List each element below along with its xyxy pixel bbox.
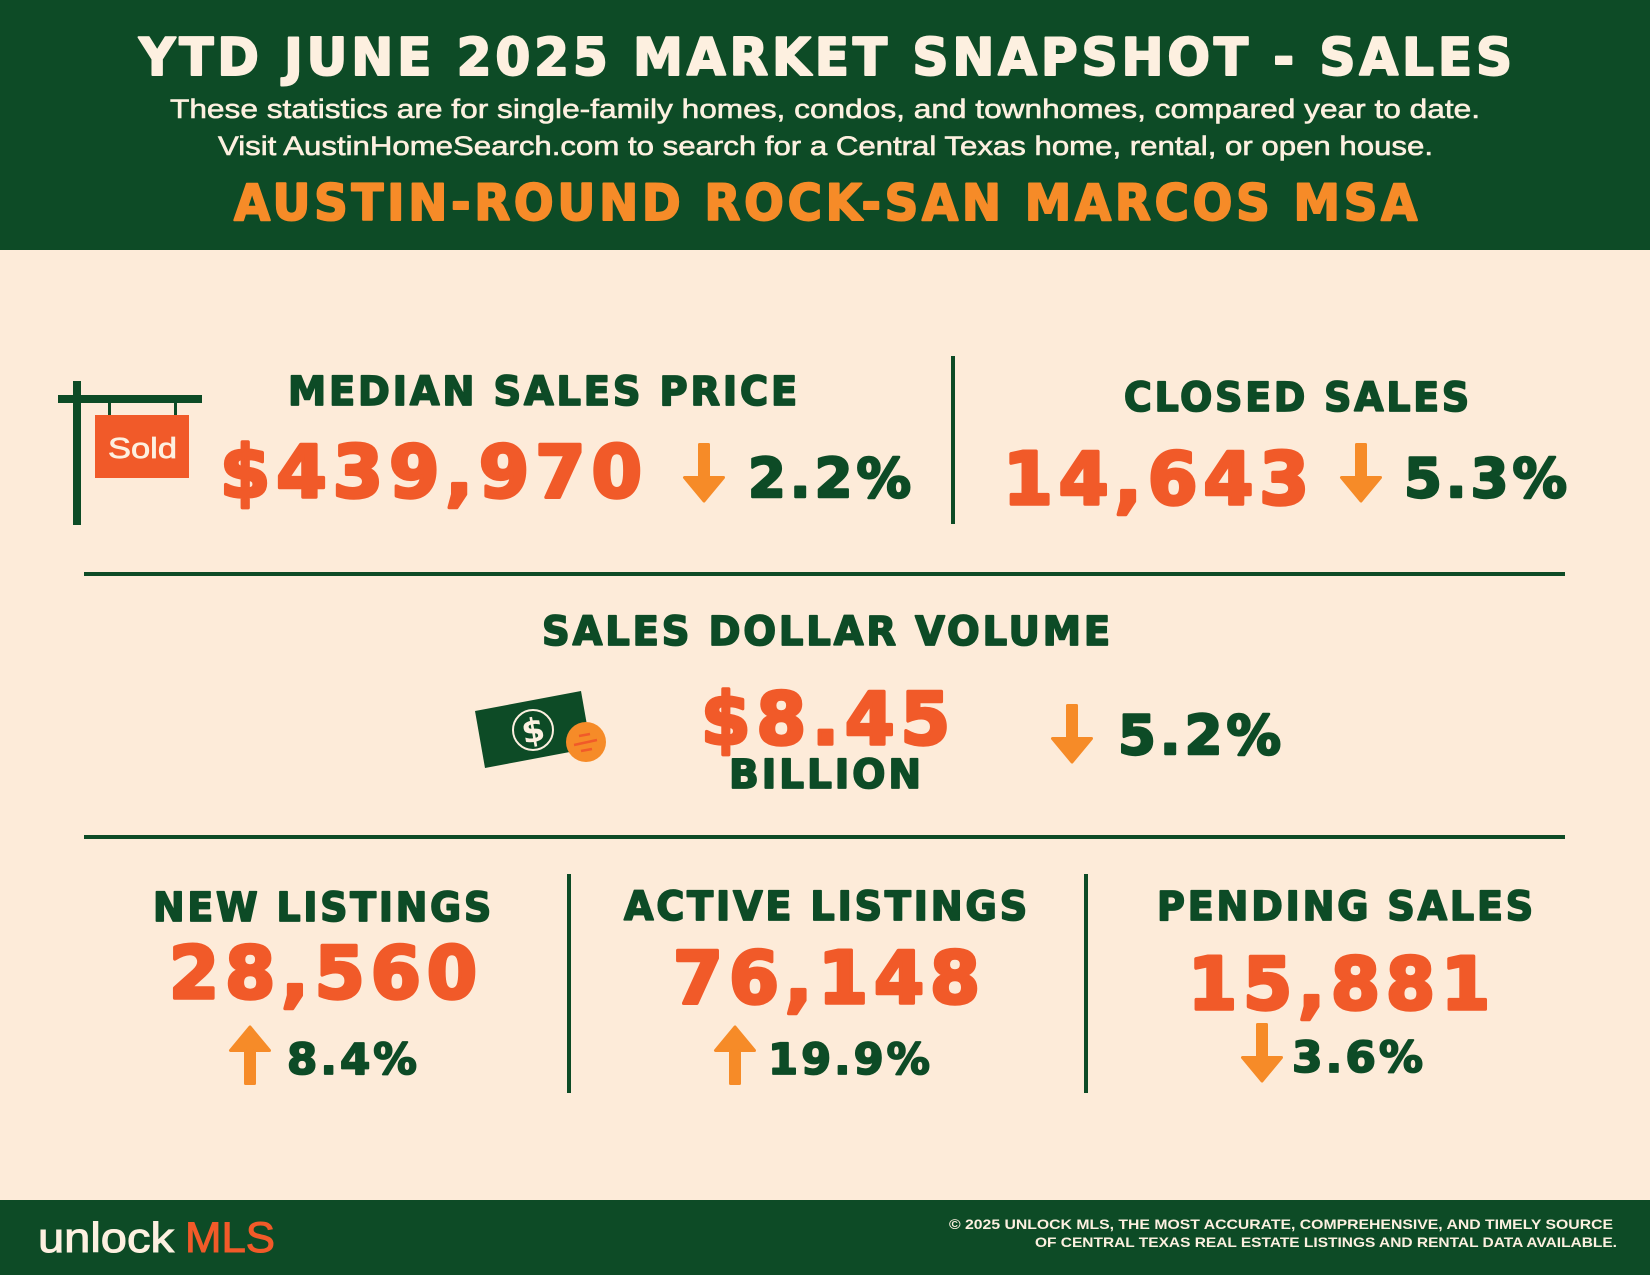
- region heading: AUSTIN-ROUND ROCK-SAN MARCOS MSA: [234, 174, 1421, 232]
- arrow up: [230, 1027, 270, 1084]
- subtitle line 1: These statistics are for single-family homes, condos, and townhomes, compared year to date.: [170, 94, 1480, 124]
- panel: active listings: [624, 884, 1030, 1085]
- change: 19.9%: [768, 1035, 933, 1085]
- heading: NEW LISTINGS: [153, 885, 494, 931]
- panel: pending sales: [1157, 884, 1536, 1083]
- arrow down: [684, 444, 724, 501]
- heading: ACTIVE LISTINGS: [624, 884, 1030, 930]
- icon: sold sign: Sold: [108, 433, 177, 465]
- panel: header: [0, 0, 1650, 250]
- change: 2.2%: [748, 447, 915, 510]
- value: $439,970: [220, 430, 648, 514]
- panel: closed sales: [1003, 375, 1571, 521]
- value: 76,148: [673, 936, 986, 1020]
- heading: SALES DOLLAR VOLUME: [542, 609, 1113, 655]
- panel: footer: [0, 1200, 1650, 1275]
- icon: sold sign: [58, 381, 202, 525]
- icon: money bill and coin: [475, 691, 606, 768]
- value: 15,881: [1188, 942, 1496, 1026]
- arrow down: [1342, 444, 1380, 501]
- change: 8.4%: [287, 1035, 420, 1085]
- change: 5.3%: [1404, 447, 1571, 510]
- panel: sales dollar volume: [475, 609, 1285, 798]
- change: 5.2%: [1118, 704, 1285, 767]
- copyright line 2: OF CENTRAL TEXAS REAL ESTATE LISTINGS AND RENTAL DATA AVAILABLE.: [1035, 1234, 1617, 1250]
- change: 3.6%: [1292, 1033, 1426, 1083]
- unit: BILLION: [729, 752, 924, 798]
- logo: MLS: [185, 1214, 275, 1262]
- logo: [38, 1214, 275, 1262]
- logo: unlock: [38, 1214, 175, 1261]
- panel: median sales price: [58, 369, 915, 525]
- heading: MEDIAN SALES PRICE: [288, 369, 800, 415]
- panel: new listings: [153, 885, 494, 1085]
- copyright line 1: © 2025 UNLOCK MLS, THE MOST ACCURATE, COMPREHENSIVE, AND TIMELY SOURCE: [949, 1216, 1613, 1232]
- arrow up: [716, 1027, 754, 1084]
- arrow down: [1242, 1024, 1282, 1081]
- arrow down: [1052, 706, 1092, 762]
- value: $8.45: [701, 677, 956, 761]
- value: 28,560: [169, 931, 483, 1015]
- subtitle line 2: Visit AustinHomeSearch.com to search for a Central Texas home, rental, or open house.: [218, 131, 1433, 161]
- value: 14,643: [1003, 437, 1315, 521]
- heading: PENDING SALES: [1157, 884, 1536, 930]
- icon: money bill and coin: $: [518, 709, 548, 752]
- title: YTD JUNE 2025 MARKET SNAPSHOT - SALES: [138, 28, 1516, 88]
- heading: CLOSED SALES: [1124, 375, 1472, 421]
